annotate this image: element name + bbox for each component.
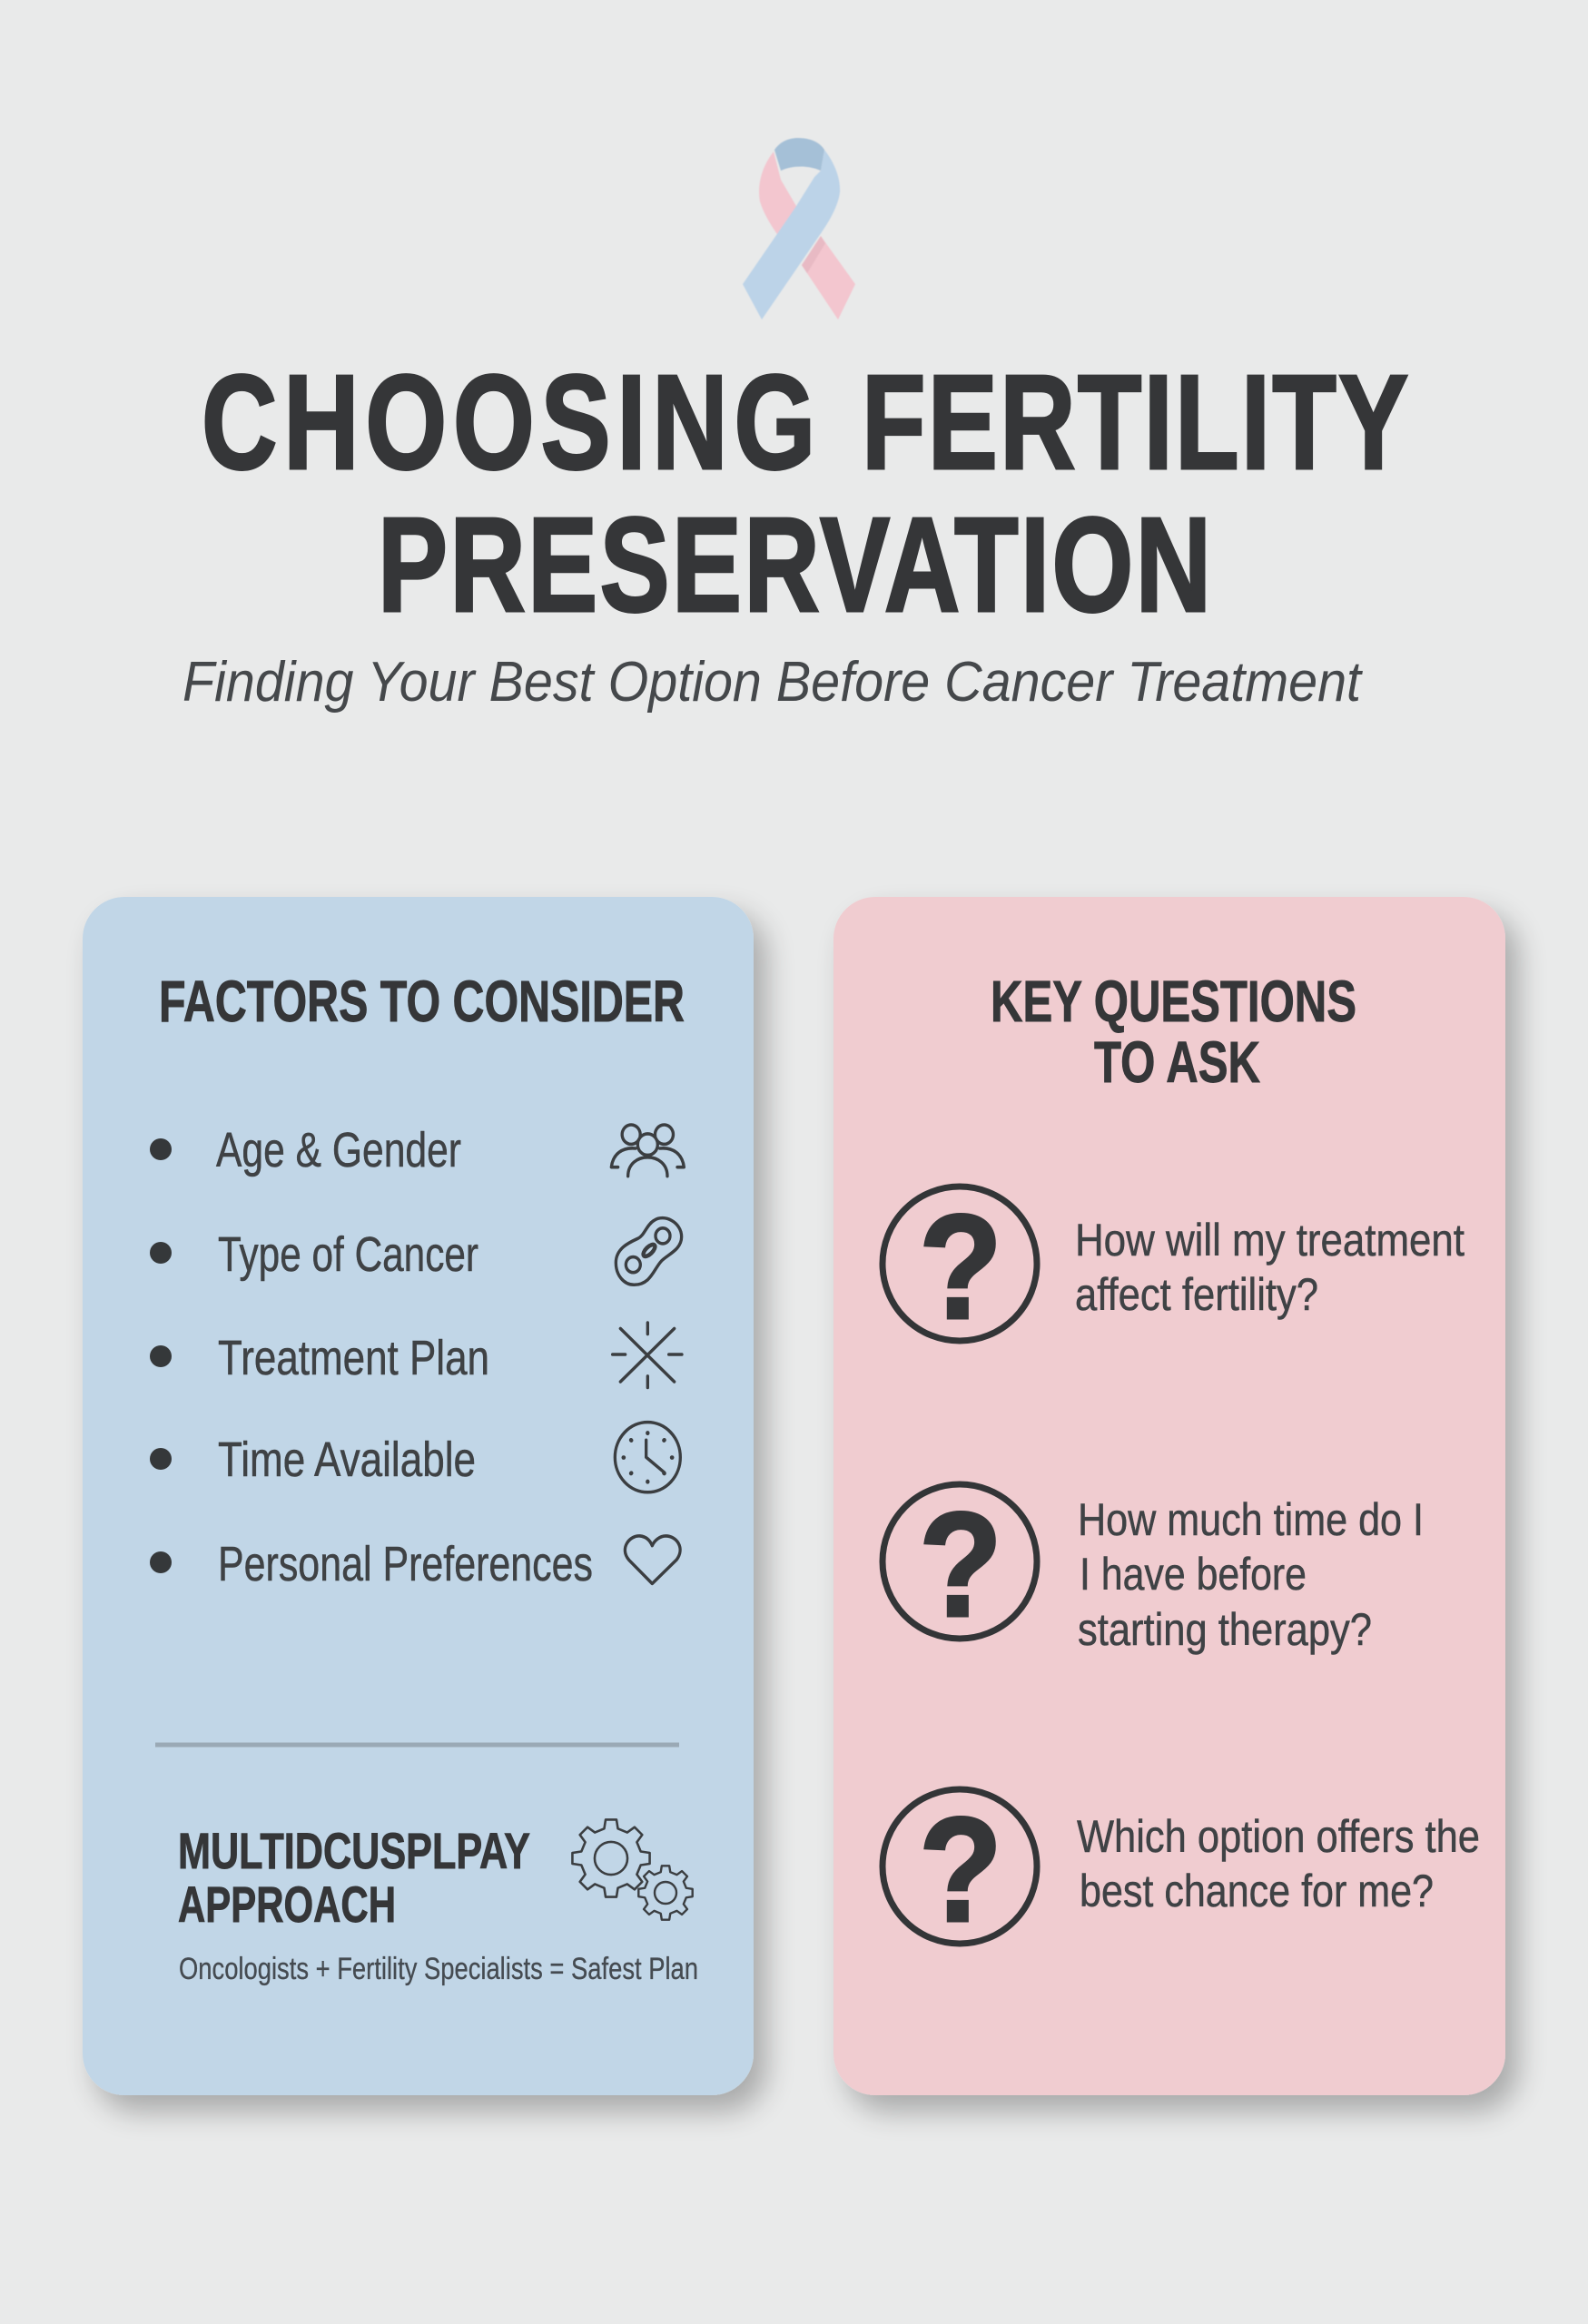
icon: gears (572, 1819, 693, 1920)
title (202, 348, 1408, 640)
question 1 (1075, 1215, 1465, 1320)
factor: personal preferences: Personal Preferences (218, 1537, 593, 1591)
factor: type of cancer (150, 1227, 478, 1282)
factor: treatment plan (150, 1331, 489, 1385)
question 2: starting therapy? (1078, 1604, 1372, 1655)
icon: people (611, 1125, 684, 1177)
question 3 (1077, 1811, 1480, 1916)
icon: cancer cell (616, 1218, 682, 1285)
title: FERTILITY (862, 348, 1408, 497)
icon: question mark 2: ? (919, 1482, 1002, 1648)
panel: factors to consider (83, 897, 754, 2095)
heading: multidisciplinary approach: MULTIDCUSPLPAY (178, 1822, 530, 1879)
question 3: Which option offers the (1077, 1811, 1480, 1862)
icon: question mark 1: ? (919, 1184, 1002, 1350)
factor: type of cancer: Type of Cancer (218, 1227, 478, 1282)
icon: question mark 2 (883, 1482, 1037, 1648)
factor: age and gender (150, 1123, 461, 1177)
title: PRESERVATION (378, 490, 1211, 640)
heading: multidisciplinary approach: APPROACH (178, 1876, 396, 1933)
heading: key questions (991, 969, 1356, 1095)
icon: question mark 3 (883, 1787, 1037, 1953)
question 2: How much time do I (1078, 1494, 1424, 1545)
heading: factors to consider: FACTORS TO CONSIDER (159, 969, 685, 1034)
icon: radiation burst (613, 1323, 682, 1387)
question 2: I have before (1080, 1549, 1307, 1600)
heading: multidisciplinary approach (178, 1822, 530, 1933)
factor: time available (150, 1433, 476, 1487)
icon: question mark 1 (883, 1184, 1037, 1350)
icon: question mark 3: ? (919, 1787, 1002, 1953)
title: CHOOSING (202, 348, 815, 497)
question 1: affect fertility? (1075, 1269, 1318, 1320)
panel: key questions to ask (833, 897, 1505, 2095)
heading: key questions: TO ASK (1094, 1029, 1260, 1095)
text: multidisciplinary summary: Oncologists + Fertility Specialists = Safest Plan (179, 1952, 698, 1986)
icon: awareness ribbon (743, 138, 855, 320)
subtitle: Finding Your Best Option Before Cancer Treatment (182, 651, 1364, 714)
factor: treatment plan: Treatment Plan (218, 1331, 489, 1385)
factor: personal preferences (150, 1537, 593, 1591)
question 3: best chance for me? (1080, 1866, 1434, 1916)
question 1: How will my treatment (1075, 1215, 1465, 1265)
heading: key questions: KEY QUESTIONS (991, 969, 1356, 1034)
icon: heart (625, 1536, 680, 1583)
question 2 (1078, 1494, 1424, 1655)
factor: time available: Time Available (218, 1433, 476, 1487)
icon: clock (615, 1423, 680, 1492)
factor: age and gender: Age & Gender (216, 1123, 461, 1177)
